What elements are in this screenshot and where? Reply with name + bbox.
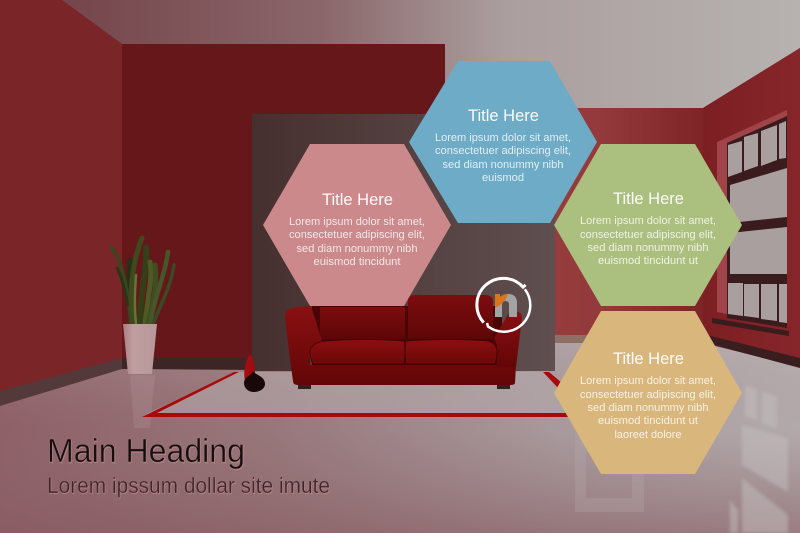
blue hexagon body text: Lorem ipsum dolor sit amet, <box>435 132 571 144</box>
hexagon: tan <box>554 311 742 474</box>
left arm and base <box>285 306 516 385</box>
pink hexagon body text: Lorem ipsum dolor sit amet, <box>289 216 425 228</box>
red sofa <box>285 295 522 389</box>
dark feature panel <box>252 114 555 371</box>
floor reflections <box>130 375 788 533</box>
plant leaves <box>111 238 174 324</box>
blue hexagon body text: euismod <box>482 172 524 184</box>
ceiling <box>62 0 800 108</box>
subheading: Lorem ipssum dollar site imute <box>47 473 330 498</box>
feet <box>298 384 311 389</box>
blue hexagon body text: consectetuer adipiscing elit, <box>435 145 571 157</box>
seat cushions <box>310 340 405 364</box>
left skirting board <box>0 358 122 406</box>
plant in white pot <box>111 238 174 374</box>
back cushions <box>320 307 405 339</box>
left back wall <box>122 44 445 370</box>
logo: ring with letter n <box>477 278 530 332</box>
hexagon: blue: Title Here <box>468 107 539 125</box>
pink hexagon body text: euismod tincidunt <box>314 256 400 268</box>
pink hexagon body text: consectetuer adipiscing elit, <box>289 229 425 241</box>
rug outline <box>142 372 568 417</box>
hexagon: pink: Title Here <box>322 191 393 209</box>
left side wall <box>0 0 122 391</box>
tan hexagon body text: laoreet dolore <box>614 429 682 441</box>
window <box>712 110 789 336</box>
green hexagon body text: euismod tincidunt ut <box>598 255 698 267</box>
hexagon: green: Title Here <box>613 190 684 208</box>
tan hexagon body text: consectetuer adipiscing elit, <box>580 389 716 401</box>
letter n <box>495 294 517 317</box>
green hexagon body text: sed diam nonummy nibh <box>588 242 708 254</box>
tan hexagon body text: Lorem ipsum dolor sit amet, <box>580 375 716 387</box>
hexagon: blue <box>409 61 597 223</box>
pink hexagon body text <box>289 216 425 268</box>
sofa backing <box>312 306 502 366</box>
tan hexagon body text: sed diam nonummy nibh <box>588 402 708 414</box>
right side wall <box>703 48 800 360</box>
tan hexagon body text <box>580 375 716 441</box>
back wall recess <box>440 108 704 348</box>
blue hexagon body text <box>435 132 571 184</box>
right arm <box>494 311 522 367</box>
pot <box>123 324 157 374</box>
tan hexagon body text: euismod tincidunt ut <box>598 415 698 427</box>
green hexagon body text <box>580 215 716 267</box>
green hexagon body text: Lorem ipsum dolor sit amet, <box>580 215 716 227</box>
right skirting board <box>703 334 800 368</box>
blue hexagon body text: sed diam nonummy nibh <box>442 159 564 171</box>
main heading: Main Heading <box>47 432 245 469</box>
green hexagon body text: consectetuer adipiscing elit, <box>580 229 716 241</box>
floor <box>0 343 800 533</box>
pink hexagon body text: sed diam nonummy nibh <box>296 243 418 255</box>
hexagon: tan: Title Here <box>613 350 684 368</box>
red and black vase <box>244 354 265 392</box>
hexagon: green <box>554 144 742 306</box>
hexagon: pink <box>263 144 451 306</box>
